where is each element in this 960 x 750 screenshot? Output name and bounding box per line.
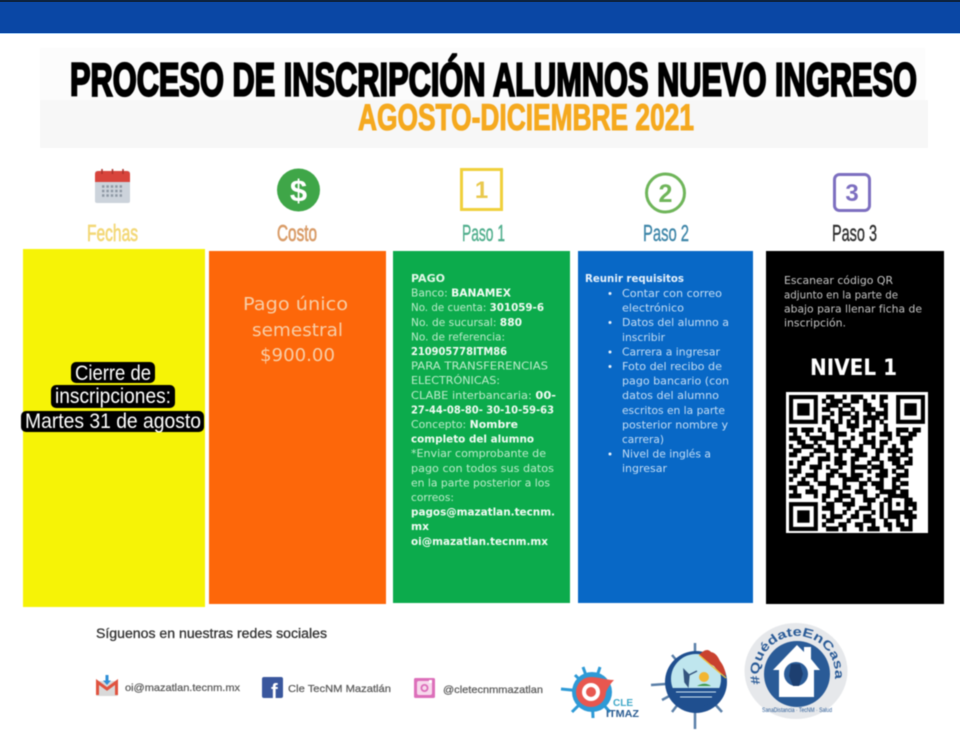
icon: mail: [96, 675, 118, 696]
closing date callout: [21, 362, 204, 433]
icon: instagram: [414, 678, 435, 698]
icon: calendar: [95, 169, 130, 203]
payment details text: oi@mazatlan.tecnm.mx: [411, 537, 548, 548]
title band background: [40, 48, 928, 148]
heading: Paso 1: Paso 1: [462, 220, 505, 246]
QR instructions: adjunto en la parte de: [784, 290, 898, 302]
requirements list: datos del alumno: [622, 391, 719, 402]
requirements list: Datos del alumno a: [622, 318, 729, 329]
payment details text: mx: [411, 522, 429, 533]
payment details text: pagos@mazatlan.tecnm.: [411, 508, 555, 519]
closing date callout: inscripciones:: [55, 385, 171, 408]
heading: Costo: Costo: [277, 220, 317, 246]
requirements list: [585, 274, 729, 475]
social: instagram: @cletecnmmazatlan: [443, 684, 543, 696]
requirements list: Foto del recibo de: [622, 362, 722, 373]
payment details text: en la parte posterior a los: [411, 478, 550, 489]
requirements list: Contar con correo: [622, 289, 722, 300]
icon: step 2 circle: 2: [659, 180, 672, 208]
social: facebook: Cle TecNM Mazatlán: [288, 683, 391, 695]
level label: NIVEL 1: [810, 356, 897, 381]
payment details text: Banco: BANAMEX: [411, 289, 511, 300]
payment details text: completo del alumno: [411, 435, 534, 446]
payment details text: PAGO: [411, 274, 445, 285]
requirements list: ingresar: [622, 464, 668, 475]
requirements list: Carrera a ingresar: [622, 347, 721, 358]
cost text: semestral: [252, 321, 343, 341]
subtitle: AGOSTO-DICIEMBRE 2021: [358, 97, 694, 138]
payment details text: 210905778ITM86: [411, 347, 507, 358]
logo: CLE ITMAZ: [561, 667, 640, 720]
cost text: [243, 295, 348, 366]
social: email: [96, 675, 241, 696]
heading: Fechas: Fechas: [87, 220, 138, 246]
social: instagram: [414, 678, 543, 698]
logo: institute gear seal: [651, 643, 727, 729]
payment details text: correos:: [411, 493, 454, 504]
icon: facebook: f: [271, 681, 278, 703]
requirements list: escritos en la parte: [622, 406, 725, 417]
closing date callout: Martes 31 de agosto: [25, 410, 201, 433]
requirements list: inscribir: [622, 333, 666, 344]
badge: #QuédateEnCasa: [744, 623, 848, 719]
panel: paso 2: [578, 251, 753, 603]
QR instructions: [784, 275, 922, 330]
social: email: oi@mazatlan.tecnm.mx: [125, 682, 241, 694]
social heading: Síguenos en nuestras redes sociales: [96, 626, 327, 641]
payment details text: [411, 274, 556, 548]
requirements list: posterior nombre y: [622, 420, 728, 431]
payment details text: CLABE interbancaria: 00-: [411, 391, 556, 402]
payment details text: ELECTRÓNICAS:: [411, 374, 500, 387]
requirements list: Reunir requisitos: [585, 274, 684, 285]
heading: Paso 3: Paso 3: [832, 220, 877, 246]
top header band: [0, 0, 960, 34]
logo: CLE ITMAZ: ITMAZ: [606, 708, 640, 720]
payment details text: pago con todos sus datos: [411, 464, 554, 475]
cost text: Pago único: [243, 295, 348, 315]
heading: Paso 2: Paso 2: [643, 220, 689, 246]
icon: step 3 box: [834, 174, 870, 210]
QR instructions: abajo para llenar ficha de: [784, 304, 922, 316]
icon: step 1 box: [462, 170, 502, 210]
QR code: [786, 392, 928, 533]
badge: #QuédateEnCasa: #QuédateEnCasa: [750, 627, 842, 685]
payment details text: *Enviar comprobante de: [411, 449, 546, 460]
panel: paso 1: [393, 251, 570, 603]
payment details text: No. de referencia:: [411, 332, 505, 343]
QR instructions: Escanear código QR: [784, 275, 893, 287]
social: facebook: [262, 677, 391, 703]
requirements list: Nivel de inglés a: [622, 449, 711, 461]
badge: #QuédateEnCasa: SanaDistancia · TecNM · Salud: [762, 708, 832, 714]
icon: step 3 box: 3: [845, 180, 859, 207]
payment details text: Concepto: Nombre: [411, 420, 518, 431]
icon: step 2 circle: [646, 174, 684, 212]
panel: fechas: [21, 249, 205, 607]
QR instructions: inscripción.: [784, 318, 846, 330]
logo: CLE ITMAZ: CLE: [613, 698, 633, 709]
payment details text: PARA TRANSFERENCIAS: [411, 362, 548, 373]
requirements list: carrera): [622, 435, 664, 446]
payment details text: No. de sucursal: 880: [411, 318, 522, 329]
icon: dollar coin: $: [290, 173, 307, 208]
cost text: $900.00: [260, 346, 335, 366]
requirements list: electrónico: [622, 303, 684, 315]
payment details text: 27-44-08-80- 30-10-59-63: [411, 405, 554, 416]
icon: step 1 box: 1: [475, 177, 488, 204]
requirements list: pago bancario (con: [622, 377, 729, 388]
icon: dollar coin: [277, 168, 320, 212]
panel: paso 3: [766, 251, 944, 604]
payment details text: No. de cuenta: 301059-6: [411, 303, 544, 314]
closing date callout: Cierre de: [75, 362, 151, 385]
panel: costo: [209, 251, 386, 604]
